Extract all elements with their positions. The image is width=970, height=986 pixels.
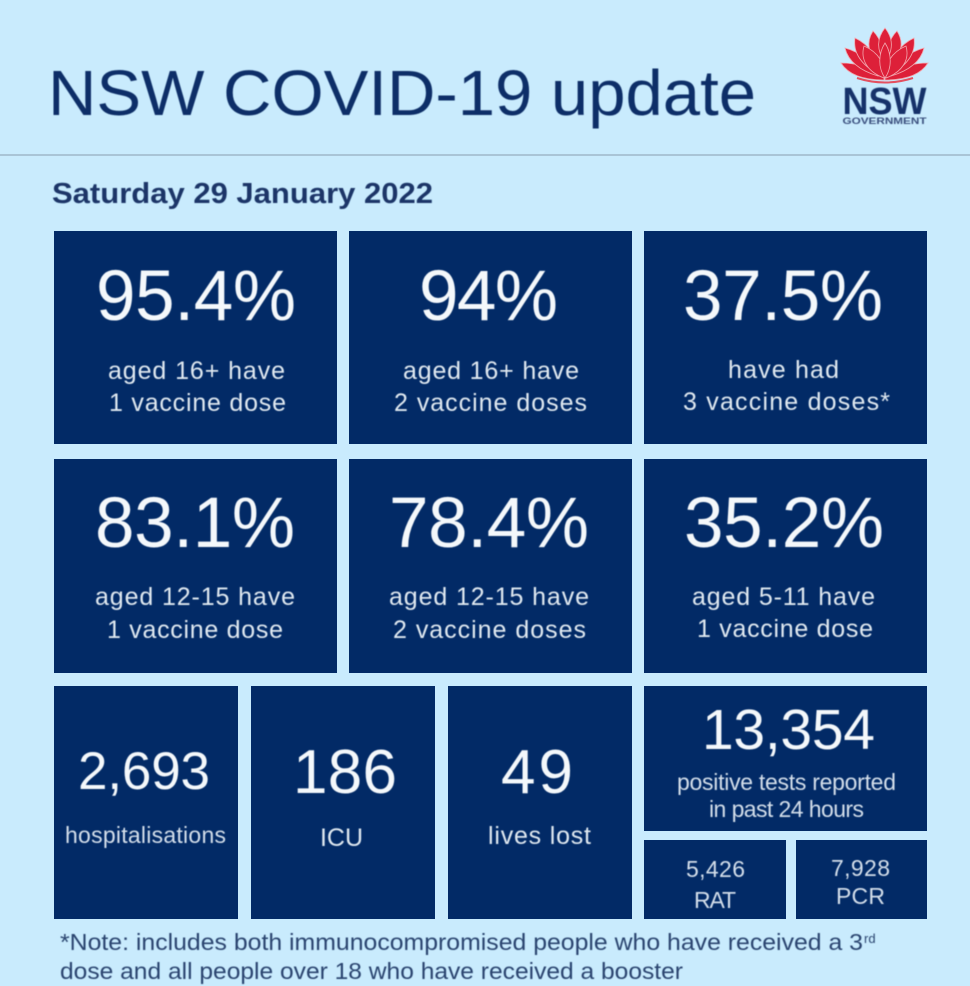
panel: 35.2% aged 5-11 one dose: 1 vaccine dose — [697, 615, 873, 643]
panel: ICU: 186 — [293, 738, 397, 807]
panel: 35.2% aged 5-11 one dose — [644, 459, 927, 673]
panel: 37.5% three doses: 37.5% — [683, 257, 883, 336]
icon: NSW Government waratah logo: GOVERNMENT — [842, 116, 927, 127]
panel: 94% aged 16+ two doses: aged 16+ have — [403, 357, 579, 385]
header divider — [0, 154, 970, 156]
panel: ICU — [251, 686, 435, 919]
date heading: Saturday 29 January 2022 — [52, 178, 433, 210]
panel: 95.4% aged 16+ one dose: aged 16+ have — [108, 357, 285, 385]
panel: 95.4% aged 16+ one dose: 1 vaccine dose — [109, 389, 286, 417]
panel: hospitalisations — [54, 686, 238, 919]
icon: NSW Government waratah logo — [841, 28, 928, 127]
icon: NSW Government waratah logo: NSW — [842, 81, 927, 123]
panel: 94% aged 16+ two doses — [349, 231, 632, 444]
panel: 35.2% aged 5-11 one dose: aged 5-11 have — [692, 583, 875, 611]
panel: 78.4% aged 12-15 two doses: 2 vaccine doses — [393, 616, 586, 644]
panel: hospitalisations: hospitalisations — [65, 822, 226, 848]
panel: ICU: ICU — [320, 824, 363, 852]
panel: 95.4% aged 16+ one dose — [54, 231, 337, 444]
panel: PCR — [796, 840, 927, 919]
panel: 95.4% aged 16+ one dose: 95.4% — [96, 257, 296, 336]
panel: 37.5% three doses: have had — [728, 356, 839, 384]
panel: hospitalisations: 2,693 — [78, 742, 210, 801]
panel: lives lost — [448, 686, 632, 919]
panel: 37.5% three doses: 3 vaccine doses* — [683, 388, 890, 416]
panel: 83.1% aged 12-15 one dose: 83.1% — [95, 484, 295, 563]
panel: RAT: RAT — [694, 887, 736, 913]
panel: positive tests: positive tests reported — [677, 769, 896, 795]
panel: positive tests: in past 24 hours — [709, 796, 864, 822]
panel: 83.1% aged 12-15 one dose: 1 vaccine dose — [107, 616, 283, 644]
panel: 35.2% aged 5-11 one dose: 35.2% — [684, 484, 884, 563]
panel: 83.1% aged 12-15 one dose — [54, 459, 337, 673]
panel: 83.1% aged 12-15 one dose: aged 12-15 have — [95, 583, 295, 611]
panel: 78.4% aged 12-15 two doses: 78.4% — [389, 484, 589, 563]
panel: PCR: PCR — [836, 883, 885, 909]
panel: lives lost: lives lost — [488, 822, 591, 850]
panel: positive tests: 13,354 — [702, 698, 875, 762]
panel: 78.4% aged 12-15 two doses — [349, 459, 632, 673]
panel: lives lost: 49 — [501, 738, 573, 807]
panel: RAT — [644, 840, 786, 919]
panel: 37.5% three doses — [644, 231, 927, 444]
panel: 94% aged 16+ two doses: 2 vaccine doses — [394, 389, 587, 417]
panel: RAT: 5,426 — [686, 856, 745, 882]
panel: 94% aged 16+ two doses: 94% — [419, 257, 558, 336]
panel: positive tests — [644, 686, 927, 831]
footnote: *Note: includes both immunocompromised people who have received a 3 — [60, 929, 863, 955]
panel: PCR: 7,928 — [831, 855, 890, 881]
panel: 78.4% aged 12-15 two doses: aged 12-15 have — [389, 583, 589, 611]
footnote — [60, 929, 876, 984]
footnote: dose and all people over 18 who have received a booster — [60, 958, 683, 984]
footnote: rd — [864, 931, 876, 946]
title: NSW COVID-19 update — [48, 57, 756, 129]
